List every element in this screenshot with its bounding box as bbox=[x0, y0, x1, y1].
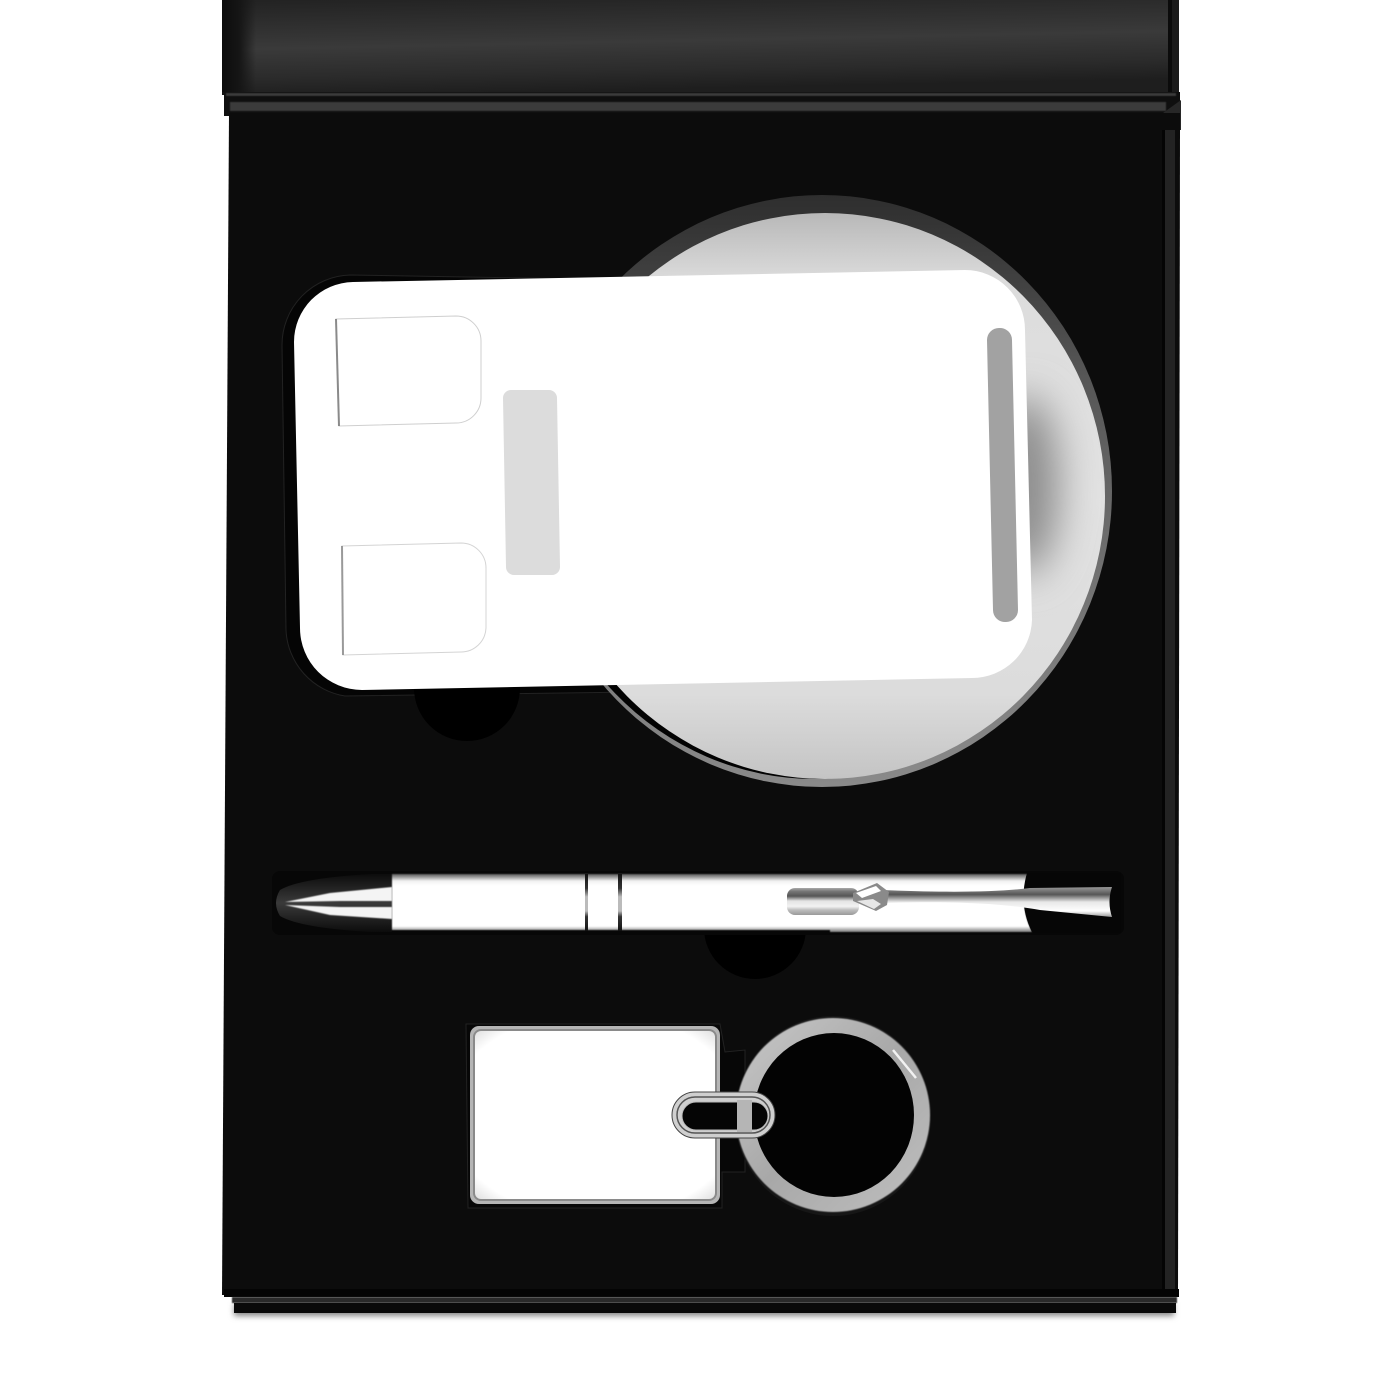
disc rim bbox=[532, 195, 1112, 787]
phone stand plate bbox=[294, 270, 1032, 690]
finger hole left bbox=[414, 635, 520, 741]
box body side walls bbox=[222, 113, 1180, 1295]
pen end cap bbox=[1023, 873, 1121, 933]
square cutout upper left edge bbox=[336, 319, 339, 426]
clip knob bbox=[853, 883, 889, 911]
plate shadow on disc bbox=[991, 395, 1059, 575]
box lid bbox=[222, 0, 1179, 110]
metal plate bbox=[470, 1026, 720, 1204]
keychain bbox=[466, 1016, 931, 1216]
pen ring bands bbox=[585, 874, 622, 931]
pen recess bbox=[272, 871, 1124, 935]
square cutout upper bbox=[336, 316, 481, 426]
phone stand recess bbox=[282, 275, 640, 696]
pen barrel bbox=[392, 874, 1032, 932]
right grey slot bbox=[987, 328, 1018, 622]
disc surface bbox=[545, 213, 1105, 779]
clip stem bbox=[882, 887, 1112, 917]
clip body bbox=[787, 888, 859, 915]
pen clip bbox=[787, 883, 1112, 917]
centre grey slot bbox=[503, 390, 560, 575]
hinge band bbox=[224, 92, 1181, 130]
key loop bbox=[672, 1092, 775, 1138]
square cutout lower bbox=[342, 543, 486, 655]
disc shadow gap bbox=[608, 685, 830, 779]
pen bbox=[272, 871, 1124, 935]
pen tip bbox=[276, 874, 392, 932]
square cutout lower left edge bbox=[342, 546, 343, 655]
charging disc bbox=[603, 195, 1112, 787]
finger hole under pen bbox=[704, 877, 806, 979]
bottom box edge bbox=[224, 1289, 1179, 1313]
gift box illustration bbox=[222, 0, 1181, 1320]
plate recess bbox=[466, 1024, 745, 1208]
foam insert bbox=[226, 113, 1162, 1290]
box shadow bbox=[234, 1304, 1174, 1316]
key ring bbox=[735, 1016, 931, 1216]
